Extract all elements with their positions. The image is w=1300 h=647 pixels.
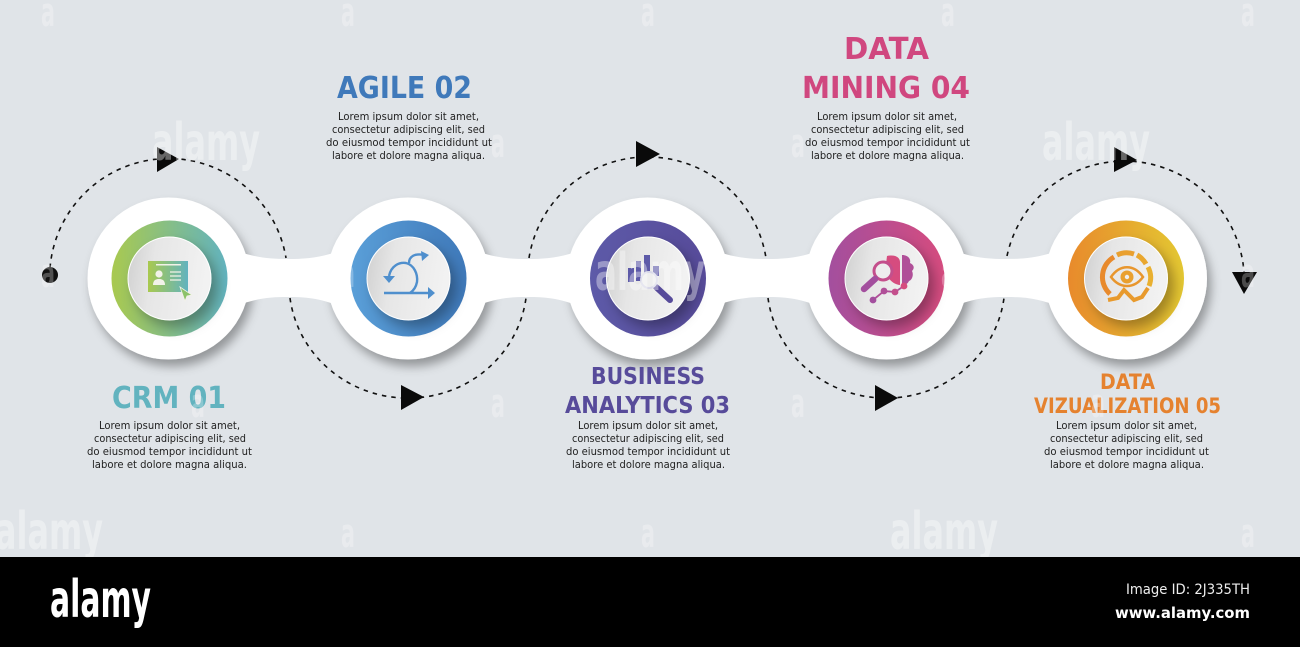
step 1 title: CRM 01 bbox=[112, 381, 226, 416]
watermark overlay: a bbox=[491, 121, 505, 167]
arrowheads bbox=[157, 141, 1257, 411]
connecting bands bbox=[236, 251, 1058, 306]
step circle bases bbox=[88, 198, 1207, 360]
watermark overlay: a bbox=[1241, 511, 1255, 557]
watermark overlay: a bbox=[791, 121, 805, 167]
watermark overlay: a bbox=[341, 251, 355, 297]
step 4 description bbox=[805, 110, 971, 162]
step 2 description: labore et dolore magna aliqua. bbox=[332, 149, 485, 162]
image id: Image ID: 2J335TH bbox=[1126, 582, 1250, 598]
watermark overlay: a bbox=[41, 251, 55, 297]
step 3 description: consectetur adipiscing elit, sed bbox=[572, 432, 724, 445]
watermark overlay: alamy bbox=[0, 502, 103, 562]
step 3 description bbox=[566, 419, 731, 471]
watermark overlay: a bbox=[491, 381, 505, 427]
step 2 ring bbox=[350, 220, 466, 336]
start dot bbox=[42, 267, 58, 283]
step 1 description bbox=[87, 419, 253, 471]
step 3 description: Lorem ipsum dolor sit amet, bbox=[578, 419, 718, 432]
step 5 ring bbox=[1068, 220, 1184, 336]
step 2 description: do eiusmod tempor incididunt ut bbox=[326, 136, 493, 149]
watermark overlay: a bbox=[191, 381, 205, 427]
step 4 description: Lorem ipsum dolor sit amet, bbox=[817, 110, 957, 123]
step 1 description: do eiusmod tempor incididunt ut bbox=[87, 445, 253, 458]
watermark overlay: a bbox=[1241, 251, 1255, 297]
watermark overlay: alamy bbox=[890, 502, 998, 562]
step 3 description: labore et dolore magna aliqua. bbox=[572, 458, 725, 471]
watermark overlay: alamy bbox=[152, 113, 260, 173]
step 1 description: consectetur adipiscing elit, sed bbox=[94, 432, 246, 445]
step 4 disc bbox=[845, 237, 928, 320]
step 2 title: AGILE 02 bbox=[337, 71, 472, 106]
step 4 description: labore et dolore magna aliqua. bbox=[811, 149, 964, 162]
watermark overlay: a bbox=[791, 381, 805, 427]
step 4 description: consectetur adipiscing elit, sed bbox=[811, 123, 964, 136]
watermark overlay: a bbox=[941, 251, 955, 297]
watermark overlay: a bbox=[341, 511, 355, 557]
step 3 title: BUSINESS bbox=[591, 364, 705, 390]
step 4 title: MINING 04 bbox=[802, 71, 970, 106]
step 2 description: Lorem ipsum dolor sit amet, bbox=[338, 110, 479, 123]
icon: analytics bars and magnifier bbox=[628, 255, 670, 300]
step 5 description: labore et dolore magna aliqua. bbox=[1050, 458, 1204, 471]
icon: data mining brain, magnifier and chart bbox=[864, 255, 914, 303]
step 3 ring bbox=[590, 220, 706, 336]
watermark overlay: a bbox=[1091, 381, 1105, 427]
step 1 description: Lorem ipsum dolor sit amet, bbox=[99, 419, 240, 432]
step 1 description: labore et dolore magna aliqua. bbox=[92, 458, 247, 471]
step 2 description: consectetur adipiscing elit, sed bbox=[332, 123, 485, 136]
step 4 ring bbox=[828, 220, 944, 336]
step 3 disc bbox=[606, 237, 690, 320]
watermark overlay: alamy bbox=[595, 243, 705, 303]
step 5 title: VIZUALIZATION 05 bbox=[1034, 394, 1221, 418]
step 5 description: consectetur adipiscing elit, sed bbox=[1050, 432, 1203, 445]
step 5 description: Lorem ipsum dolor sit amet, bbox=[1056, 419, 1197, 432]
icon: CRM contact card with cursor bbox=[148, 261, 192, 301]
step 5 description bbox=[1044, 419, 1210, 471]
step 4 title: DATA bbox=[844, 32, 930, 67]
step 4 title bbox=[802, 32, 970, 106]
footer logo: alamy bbox=[50, 570, 151, 630]
watermark overlay: a bbox=[641, 511, 655, 557]
footer bar bbox=[0, 557, 1300, 647]
step 2 description bbox=[326, 110, 493, 162]
step 1 ring bbox=[112, 220, 228, 336]
step 3 description: do eiusmod tempor incididunt ut bbox=[566, 445, 731, 458]
step 5 disc bbox=[1084, 237, 1168, 320]
step 1 disc bbox=[128, 237, 211, 320]
dashed path arcs bbox=[50, 157, 1244, 398]
icon: agile sprint loop bbox=[383, 251, 435, 299]
step 5 title bbox=[1034, 370, 1221, 418]
step 2 disc bbox=[367, 237, 450, 320]
icon: eye with circular gauge and trend line bbox=[1102, 253, 1151, 300]
step 3 title: ANALYTICS 03 bbox=[565, 393, 730, 419]
step 3 title bbox=[565, 364, 730, 419]
watermark overlay: alamy bbox=[1042, 113, 1150, 173]
step 5 title: DATA bbox=[1100, 370, 1156, 394]
step 4 description: do eiusmod tempor incididunt ut bbox=[805, 136, 971, 149]
website: www.alamy.com bbox=[1115, 604, 1250, 622]
white connector ribbon with five circles bbox=[88, 198, 1207, 360]
step 5 description: do eiusmod tempor incididunt ut bbox=[1044, 445, 1210, 458]
